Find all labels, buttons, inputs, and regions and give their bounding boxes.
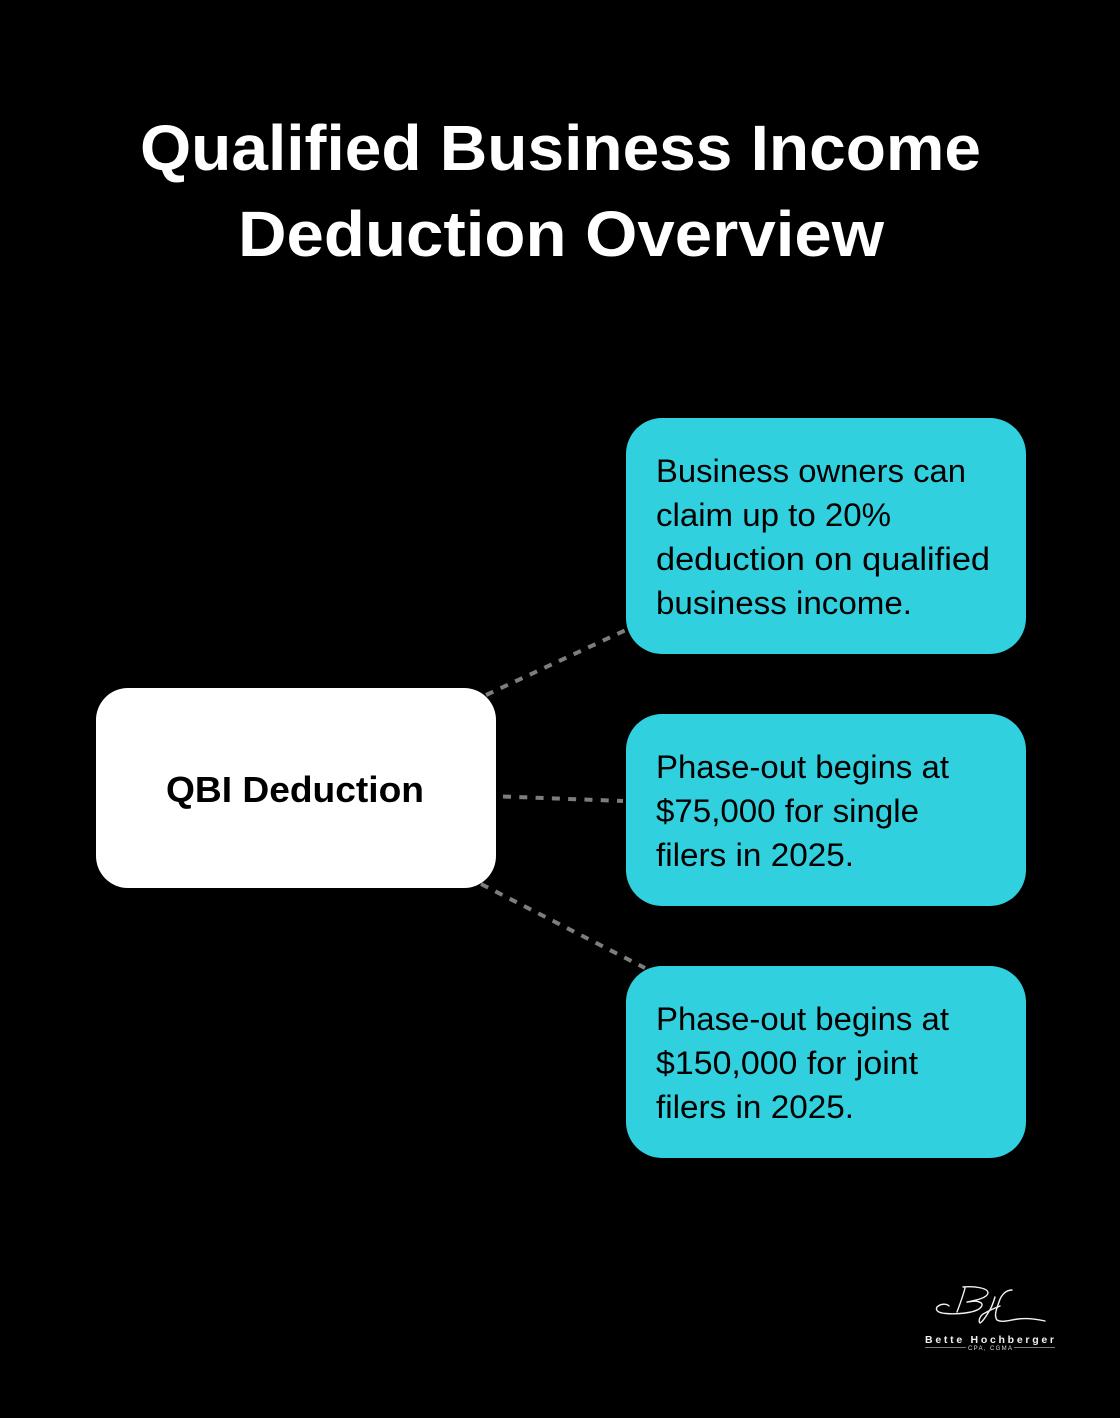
node: QBI Deduction [96,688,496,888]
card: up to 20% deduction: claim up to 20% [656,497,891,533]
title [140,112,981,270]
logo: Bette Hochberger signature: CPA, CGMA [968,1346,1012,1352]
title: Qualified Business Income [140,112,981,184]
card: joint filers phase-out: $150,000 for joint [656,1045,918,1081]
logo: Bette Hochberger signature [925,1287,1055,1352]
card: single filers phase-out: $75,000 for single [656,793,919,829]
connector: QBI to single filers [503,796,623,801]
card: joint filers phase-out: Phase-out begins at [656,1001,949,1037]
logo: Bette Hochberger signature: Bette Hochberger [925,1334,1054,1346]
card: up to 20% deduction: Business owners can [656,453,966,489]
card: single filers phase-out: filers in 2025. [656,837,854,873]
connector: QBI to joint filers [481,884,645,968]
card: up to 20% deduction: deduction on qualified [656,541,990,577]
connector: QBI to 20% deduction [486,629,628,695]
node: QBI Deduction: QBI Deduction [166,769,424,810]
card: up to 20% deduction: business income. [656,585,912,621]
title: Deduction Overview [238,198,884,270]
card: single filers phase-out [626,714,1026,906]
card: joint filers phase-out: filers in 2025. [656,1089,854,1125]
card: single filers phase-out: Phase-out begins at [656,749,949,785]
card: joint filers phase-out [626,966,1026,1158]
card: up to 20% deduction [626,418,1026,654]
